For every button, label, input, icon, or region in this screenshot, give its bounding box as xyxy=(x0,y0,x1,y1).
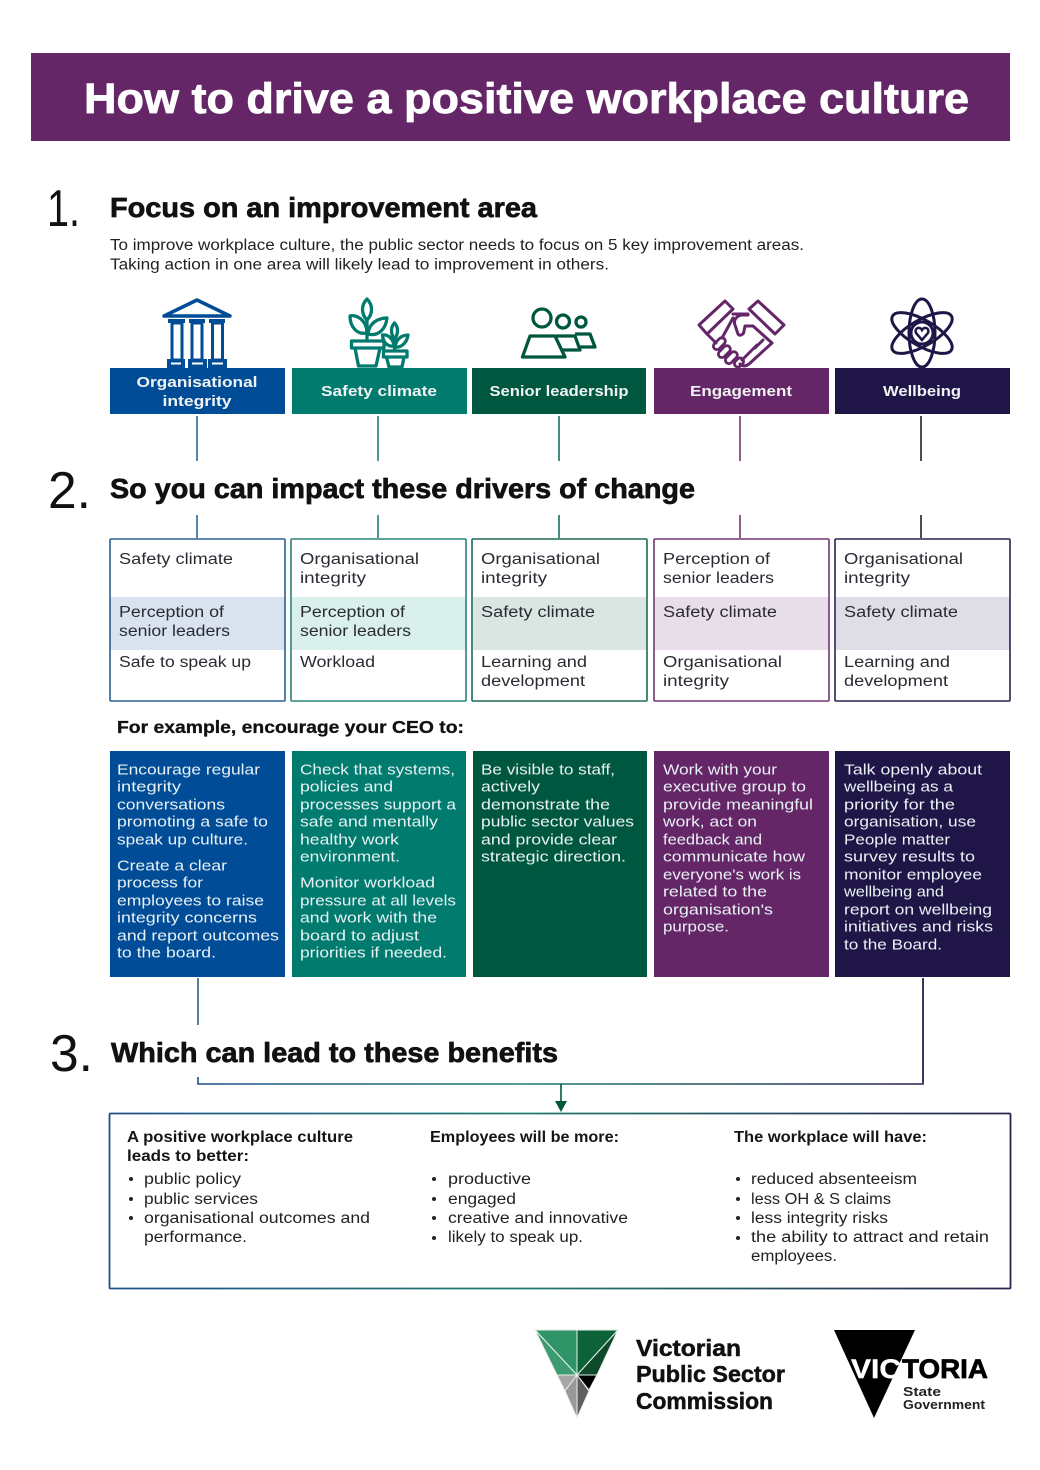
logo: Victoria State Government: State xyxy=(903,1384,941,1399)
logo: Victoria State Government: TORIA xyxy=(902,1354,988,1384)
bar: senior leadership: Senior leadership xyxy=(490,384,629,400)
panel: CEO actions integrity: to the board. xyxy=(117,945,216,962)
panel: drivers senior leadership column: integrity xyxy=(481,570,547,587)
panel: drivers safety climate column: Perception of xyxy=(300,604,406,621)
panel: drivers safety climate column: senior leaders xyxy=(300,623,411,640)
panel: CEO actions engagement: provide meaningful xyxy=(663,797,813,814)
logo: Victorian Public Sector Commission xyxy=(535,1330,785,1418)
benefits column: employees: Employees will be more: xyxy=(430,1129,619,1146)
panel: CEO actions safety: priorities if needed. xyxy=(300,945,447,962)
section 2 heading xyxy=(48,462,695,520)
icon: potted plants xyxy=(350,299,408,367)
panel: drivers wellbeing column: development xyxy=(844,673,949,690)
panel: drivers engagement column xyxy=(654,539,829,701)
logo: Victoria State Government xyxy=(834,1330,988,1418)
panel: CEO actions safety: environment. xyxy=(300,849,400,866)
benefits column: workplace: less integrity risks xyxy=(751,1210,888,1227)
panel: drivers safety climate column: integrity xyxy=(300,570,366,587)
heading text: Which can lead to these benefits xyxy=(111,1037,558,1068)
panel: CEO actions leadership: Be visible to staff, xyxy=(481,762,615,779)
panel: drivers organisational integrity column: Safe to speak up xyxy=(119,654,251,671)
number 2: 2. xyxy=(48,462,91,520)
panel: drivers safety climate column xyxy=(291,539,466,701)
panel: drivers engagement column: integrity xyxy=(663,673,729,690)
section 1 heading xyxy=(47,180,537,238)
benefits column: culture: leads to better: xyxy=(127,1148,249,1165)
panel: CEO actions wellbeing: People matter xyxy=(844,832,950,849)
panel: CEO actions engagement xyxy=(654,751,829,977)
panel: CEO actions leadership: public sector values xyxy=(481,814,634,831)
panel: CEO actions engagement: organisation's xyxy=(663,902,773,919)
panel: benefits xyxy=(110,1114,1010,1288)
panel: CEO actions leadership xyxy=(473,751,647,977)
panel: CEO actions engagement: feedback and xyxy=(663,832,762,849)
panel: drivers senior leadership column: development xyxy=(481,673,586,690)
panel: CEO actions integrity: speak up culture. xyxy=(117,832,248,849)
number 3: 3. xyxy=(50,1025,93,1083)
title: How to drive a positive workplace culture xyxy=(84,75,969,123)
connector lines from bars to drivers xyxy=(197,416,921,538)
panel: drivers organisational integrity column xyxy=(110,539,285,701)
panel: CEO actions safety: and work with the xyxy=(300,910,437,927)
benefits column: workplace: The workplace will have: xyxy=(734,1129,927,1146)
benefits column: workplace: less OH & S claims xyxy=(751,1191,891,1208)
connector lines to benefits xyxy=(198,978,923,1084)
panel: drivers wellbeing column: integrity xyxy=(844,570,910,587)
panel: drivers organisational integrity column: Safety climate xyxy=(119,551,233,568)
panel: CEO actions engagement: related to the xyxy=(663,884,767,901)
number 1: 1. xyxy=(47,180,80,238)
panel: CEO actions wellbeing: survey results to xyxy=(844,849,975,866)
panel: CEO actions safety: Check that systems, xyxy=(300,762,455,779)
panel: CEO actions integrity: employees to raise xyxy=(117,893,264,910)
panel: CEO actions wellbeing: initiatives and risks xyxy=(844,919,993,936)
bar: safety climate xyxy=(292,368,467,414)
panel: drivers senior leadership column xyxy=(472,539,647,701)
panel: CEO actions integrity: Encourage regular xyxy=(117,762,260,779)
panel: CEO actions integrity: conversations xyxy=(117,797,225,814)
panel: CEO actions wellbeing: priority for the xyxy=(844,797,955,814)
category bars xyxy=(110,368,1010,414)
icon: group of people xyxy=(522,309,595,357)
panel: CEO actions integrity: integrity xyxy=(117,779,182,796)
panel: CEO actions safety: pressure at all levels xyxy=(300,893,456,910)
panel: CEO actions engagement: purpose. xyxy=(663,919,729,936)
benefits column: culture xyxy=(127,1129,370,1246)
logo: Victorian Public Sector Commission: Commission xyxy=(636,1388,773,1414)
panel: drivers wellbeing column: Safety climate xyxy=(844,604,958,621)
panel: CEO actions integrity: Create a clear xyxy=(117,858,227,875)
panel: drivers organisational integrity column: senior leaders xyxy=(119,623,230,640)
benefits column: employees: productive xyxy=(448,1171,531,1188)
intro text xyxy=(110,237,804,274)
heading text: Focus on an improvement area xyxy=(110,192,537,223)
bar: wellbeing: Wellbeing xyxy=(883,384,961,400)
bar: organisational integrity: Organisational xyxy=(136,375,258,391)
subheading: for example: For example, encourage your CEO to: xyxy=(117,717,464,737)
panel: CEO actions wellbeing: organisation, use xyxy=(844,814,976,831)
logo: Victorian Public Sector Commission: Public Sector xyxy=(636,1361,785,1387)
benefits column: culture: public policy xyxy=(144,1171,241,1188)
panel: drivers engagement column: Perception of xyxy=(663,551,771,568)
panel: drivers engagement column: senior leaders xyxy=(663,570,774,587)
panel: CEO actions integrity xyxy=(110,751,285,977)
panel: CEO actions engagement: everyone's work is xyxy=(663,867,801,884)
panel: CEO actions wellbeing: wellbeing and xyxy=(843,884,944,901)
panel: CEO actions wellbeing: Talk openly about xyxy=(844,762,983,779)
benefits column: workplace: employees. xyxy=(751,1248,837,1265)
panel: drivers wellbeing column xyxy=(835,539,1010,701)
benefits column: culture: organisational outcomes and xyxy=(144,1210,370,1227)
panel: CEO actions wellbeing xyxy=(835,751,1010,977)
benefits column: employees: engaged xyxy=(448,1191,516,1208)
panel: drivers engagement column: Organisational xyxy=(663,654,782,671)
logo: Victoria State Government: Government xyxy=(903,1397,986,1412)
benefits column: employees: creative and innovative xyxy=(448,1210,628,1227)
panel: CEO actions integrity: process for xyxy=(117,875,203,892)
panel: drivers wellbeing column: Learning and xyxy=(844,654,950,671)
panel: CEO actions leadership: actively xyxy=(481,779,541,796)
benefits column: workplace: the ability to attract and retain xyxy=(751,1229,989,1246)
benefits column: workplace xyxy=(734,1129,989,1265)
icon: handshake xyxy=(699,301,784,369)
panel: CEO actions safety: board to adjust xyxy=(300,928,420,945)
panel: CEO actions safety: safe and mentally xyxy=(300,814,439,831)
panel: CEO actions wellbeing: report on wellbeing xyxy=(844,902,992,919)
benefits column: employees xyxy=(430,1129,628,1246)
panel: CEO actions integrity: integrity concerns xyxy=(117,910,257,927)
logo text: Victorian xyxy=(636,1335,741,1361)
panel: CEO actions safety: Monitor workload xyxy=(300,875,435,892)
section 3 heading xyxy=(50,1025,558,1083)
panel: drivers organisational integrity column: Perception of xyxy=(119,604,225,621)
panel: drivers senior leadership column: Learning and xyxy=(481,654,587,671)
panel: CEO actions engagement: work, act on xyxy=(662,814,757,831)
bar: organisational integrity: integrity xyxy=(162,394,232,410)
panel: drivers engagement column: Safety climate xyxy=(663,604,777,621)
panel: CEO actions engagement: communicate how xyxy=(663,849,805,866)
benefits column: culture: A positive workplace culture xyxy=(127,1129,353,1146)
panel: CEO actions wellbeing: wellbeing as a xyxy=(843,779,954,796)
panel: drivers wellbeing column: Organisational xyxy=(844,551,963,568)
icon: atom with heart xyxy=(886,299,958,367)
benefits column: culture: public services xyxy=(144,1191,258,1208)
panel: CEO actions safety: processes support a xyxy=(300,797,457,814)
benefits column: culture: performance. xyxy=(144,1229,247,1246)
panel: CEO actions wellbeing: to the Board. xyxy=(844,937,942,954)
panel: CEO actions safety: policies and xyxy=(300,779,393,796)
panel: CEO actions integrity: promoting a safe to xyxy=(117,814,268,831)
panel: CEO actions leadership: and provide clear xyxy=(481,832,617,849)
panel: CEO actions safety: healthy work xyxy=(300,832,400,849)
panel: CEO actions wellbeing: monitor employee xyxy=(844,867,982,884)
panel: CEO actions leadership: demonstrate the xyxy=(481,797,610,814)
panel: CEO actions leadership: strategic direction. xyxy=(481,849,626,866)
panel: drivers safety climate column: Organisational xyxy=(300,551,419,568)
panel: CEO actions integrity: and report outcomes xyxy=(117,928,279,945)
heading text: So you can impact these drivers of change xyxy=(110,473,695,504)
title banner xyxy=(31,53,1010,141)
benefits column: employees: likely to speak up. xyxy=(448,1229,583,1246)
arrow to benefits box xyxy=(555,1084,567,1112)
intro text: To improve workplace culture, the public sector needs to focus on 5 key improvement areas. xyxy=(110,237,804,254)
logo mark xyxy=(535,1330,618,1418)
intro text: Taking action in one area will likely lead to improvement in others. xyxy=(110,256,609,274)
panel: drivers safety climate column: Workload xyxy=(300,654,375,671)
logo: Victoria State Government: VIC xyxy=(851,1354,901,1384)
panel: drivers senior leadership column: Organisational xyxy=(481,551,600,568)
bar: senior leadership xyxy=(472,368,646,414)
panel: CEO actions engagement: executive group to xyxy=(663,779,806,796)
bar: engagement: Engagement xyxy=(690,384,792,400)
bar: engagement xyxy=(654,368,829,414)
bar: wellbeing xyxy=(835,368,1010,414)
benefits column: workplace: reduced absenteeism xyxy=(751,1171,917,1188)
panel: CEO actions safety xyxy=(292,751,466,977)
bar: safety climate: Safety climate xyxy=(321,384,437,400)
bar: organisational integrity xyxy=(110,368,285,414)
panel: drivers senior leadership column: Safety climate xyxy=(481,604,595,621)
panel: CEO actions engagement: Work with your xyxy=(663,762,777,779)
icon: building with columns xyxy=(164,300,230,368)
